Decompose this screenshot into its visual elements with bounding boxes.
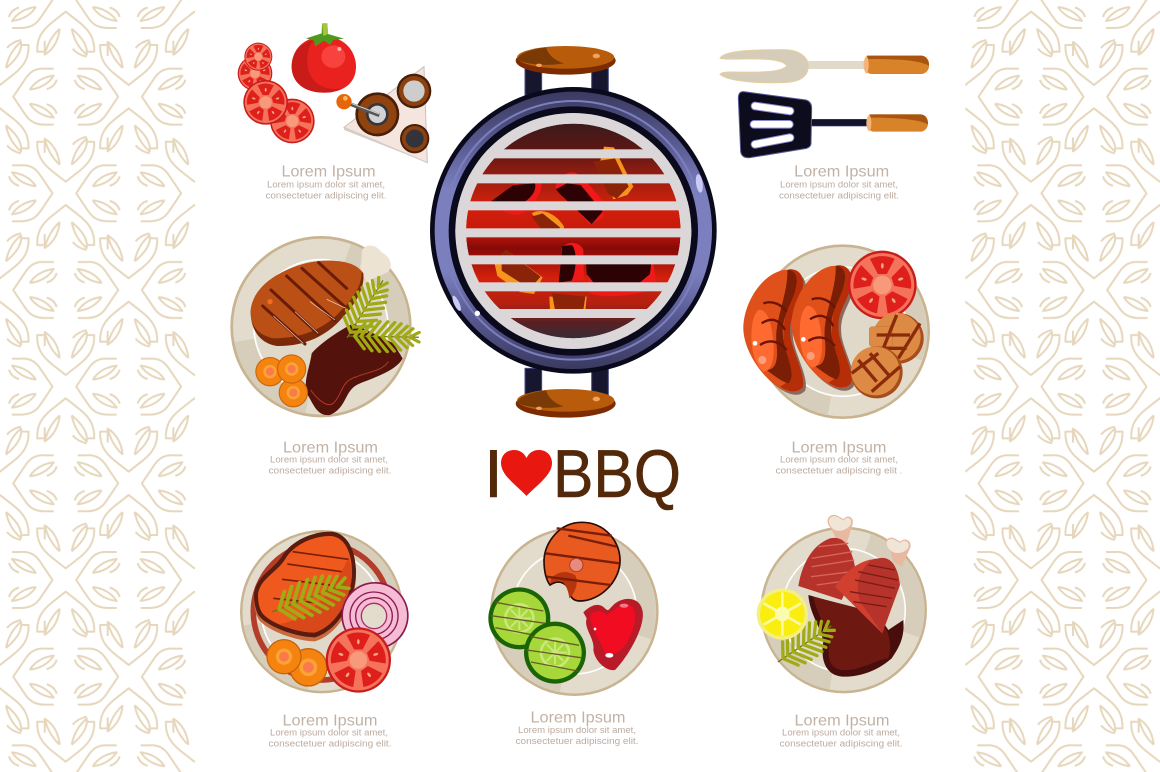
spatula bbox=[738, 92, 928, 158]
pattern panel: right leaf ornament bbox=[965, 0, 1160, 772]
plate: steak with onion and tomato bbox=[240, 530, 409, 693]
text block: tomato caption bbox=[266, 164, 386, 201]
title: I love BBQ bbox=[484, 436, 681, 512]
sausage left bbox=[743, 269, 806, 395]
pepper mills on paper bbox=[336, 67, 431, 163]
text block: salmon caption bbox=[516, 709, 638, 747]
text block: salmon caption: Lorem ipsum dolor sit amet, bbox=[518, 725, 636, 736]
plate: steak with carrots and sauce bbox=[230, 236, 419, 417]
plate bbox=[760, 527, 927, 693]
onion bbox=[341, 582, 409, 649]
grilled mushrooms bbox=[851, 313, 924, 398]
top grill handle bbox=[516, 46, 616, 95]
text block: drumstick caption: Lorem ipsum dolor sit amet, bbox=[782, 728, 900, 739]
text block: sausage caption: consectetuer adipiscing elit . bbox=[776, 465, 902, 476]
fork bbox=[720, 50, 929, 83]
sauce bbox=[808, 595, 904, 677]
text block: tools caption: Lorem Ipsum bbox=[794, 164, 889, 181]
steak bbox=[251, 261, 364, 346]
text block: drumstick caption: Lorem Ipsum bbox=[794, 712, 890, 729]
tomato slice bbox=[848, 251, 917, 319]
title: I love BBQ: BBQ bbox=[553, 436, 681, 512]
whole tomato bbox=[292, 23, 356, 93]
text block: tomato caption: Lorem Ipsum bbox=[282, 164, 376, 181]
plate: sausages, tomato and mushrooms bbox=[743, 244, 930, 419]
steak bbox=[254, 532, 356, 641]
text block: steak caption bbox=[268, 439, 392, 476]
text block: onion plate caption: consectetuer adipiscing elit. bbox=[268, 738, 392, 749]
text block: steak caption: Lorem Ipsum bbox=[283, 439, 378, 456]
text block: tools caption: consectetuer adipiscing elit. bbox=[779, 190, 899, 201]
text block: salmon caption: Lorem Ipsum bbox=[530, 709, 626, 726]
plate: salmon, cucumber and pepper bbox=[488, 522, 659, 696]
sauce bbox=[306, 323, 403, 415]
fork and spatula bbox=[720, 50, 929, 158]
grill bbox=[430, 46, 717, 418]
tomato slice bbox=[326, 627, 391, 693]
text block: drumstick caption bbox=[780, 712, 902, 749]
grate bars bbox=[453, 149, 693, 318]
text block: sausage caption: Lorem Ipsum bbox=[792, 439, 886, 456]
bone bbox=[360, 245, 391, 282]
bottom grill handle bbox=[516, 368, 616, 418]
cucumber slices bbox=[488, 587, 586, 684]
text block: onion plate caption: Lorem Ipsum bbox=[282, 712, 378, 729]
fire and coals bbox=[465, 122, 682, 340]
plate bbox=[230, 236, 412, 417]
drumstick back bbox=[798, 515, 856, 600]
rosemary sprigs bbox=[334, 272, 419, 352]
plate: drumsticks with lemon bbox=[757, 515, 927, 693]
title: I love BBQ: I bbox=[484, 436, 503, 512]
grill rim bbox=[430, 87, 717, 374]
plate bbox=[490, 527, 659, 696]
sausage right bbox=[792, 265, 854, 391]
lemon slice bbox=[757, 588, 808, 640]
tomato slices bbox=[238, 43, 315, 143]
text block: sausage caption: Lorem ipsum dolor sit amet, bbox=[780, 455, 898, 466]
rosemary sprig bbox=[769, 612, 841, 675]
red pepper bbox=[583, 599, 643, 670]
text block: steak caption: Lorem ipsum dolor sit amet, bbox=[270, 455, 388, 466]
text block: onion plate caption: Lorem ipsum dolor sit amet, bbox=[270, 728, 388, 739]
icon: heart bbox=[501, 450, 552, 496]
text block: tools caption bbox=[779, 164, 899, 201]
text block: tools caption: Lorem ipsum dolor sit amet, bbox=[780, 179, 898, 190]
tomato, slices and pepper mills bbox=[238, 23, 431, 163]
carrot slices bbox=[255, 354, 308, 407]
text block: onion plate caption bbox=[268, 712, 392, 749]
pattern panel: left leaf ornament bbox=[0, 0, 195, 772]
drumstick front bbox=[835, 538, 911, 633]
text block: steak caption: consectetuer adipiscing elit. bbox=[268, 465, 392, 476]
salmon steak bbox=[544, 522, 620, 601]
carrot slices bbox=[266, 639, 328, 687]
rosemary sprig bbox=[266, 567, 353, 628]
plate bbox=[240, 530, 403, 693]
text block: drumstick caption: consectetuer adipiscing elit. bbox=[780, 738, 902, 749]
text block: sausage caption bbox=[776, 439, 902, 476]
plate bbox=[755, 244, 930, 419]
text block: salmon caption: consectetuer adipiscing elit. bbox=[516, 736, 638, 747]
grate ring bbox=[455, 113, 691, 349]
text block: tomato caption: Lorem ipsum dolor sit amet, bbox=[267, 179, 385, 190]
text block: tomato caption: consectetuer adipiscing elit. bbox=[266, 190, 386, 201]
